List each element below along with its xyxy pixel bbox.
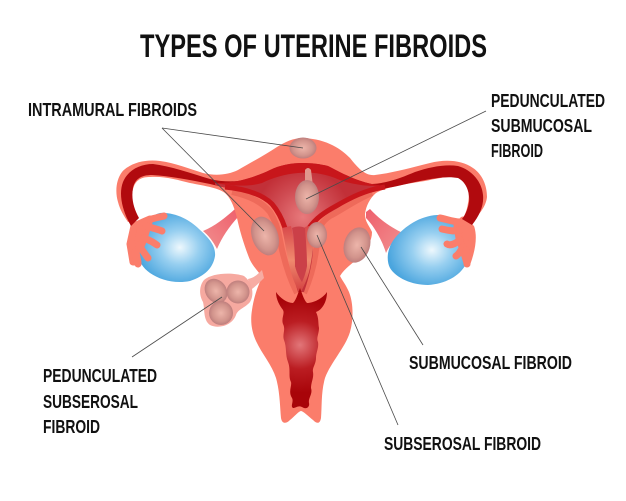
fibroid: pedunculated submucosal stalk bbox=[305, 168, 313, 186]
ovary: left bbox=[137, 213, 215, 282]
fimbriae: right bbox=[440, 218, 472, 264]
fimbriae: left bbox=[130, 216, 164, 264]
label: pedunculated submucosal fibroid: SUBMUCOSAL bbox=[491, 116, 592, 136]
label: pedunculated subserosal fibroid: SUBSEROSAL bbox=[43, 392, 138, 412]
vaginal canal bbox=[276, 288, 327, 408]
label: intramural fibroids: INTRAMURAL FIBROIDS bbox=[28, 100, 197, 120]
uterus body and tubes bbox=[116, 138, 487, 423]
fibroid: submucosal bbox=[339, 224, 375, 266]
uterine cavity bbox=[215, 163, 385, 292]
label: subserosal fibroid: SUBSEROSAL FIBROID bbox=[384, 434, 541, 454]
soft band: right of cavity bbox=[304, 193, 372, 293]
fibroid: intramural top bbox=[290, 138, 316, 158]
label: pedunculated subserosal fibroid: PEDUNCULATED bbox=[43, 366, 157, 386]
soft band: left of cavity bbox=[232, 192, 297, 293]
cervical canal folds bbox=[282, 226, 314, 294]
label: pedunculated subserosal fibroid bbox=[43, 366, 157, 437]
fibroid: intramural left bbox=[246, 213, 284, 259]
fibroid: subserosal bbox=[307, 222, 327, 248]
cavity lower band: left bbox=[225, 187, 285, 228]
fibroid cluster: pedunculated subserosal bbox=[200, 274, 252, 327]
title: TYPES OF UTERINE FIBROIDS bbox=[140, 28, 487, 64]
leader lines bbox=[132, 111, 486, 425]
uterus illustration bbox=[116, 138, 487, 423]
label: pedunculated subserosal fibroid: FIBROID bbox=[43, 417, 100, 437]
ligament: left ovary bbox=[203, 209, 238, 249]
label: pedunculated submucosal fibroid bbox=[491, 91, 605, 161]
cavity lower band: right bbox=[309, 187, 385, 228]
label: submucosal fibroid: SUBMUCOSAL FIBROID bbox=[409, 353, 572, 373]
ligament: right ovary bbox=[366, 209, 403, 253]
fallopian tube: right bbox=[372, 165, 483, 225]
cavity top band bbox=[215, 163, 385, 186]
fallopian tube: left bbox=[121, 164, 246, 226]
fibroid stalk bbox=[248, 270, 264, 290]
fibroid: pedunculated submucosal bbox=[295, 180, 319, 214]
ovary: right bbox=[388, 215, 468, 285]
label: pedunculated submucosal fibroid: FIBROID bbox=[491, 141, 543, 161]
cervical canal center bbox=[292, 226, 307, 282]
